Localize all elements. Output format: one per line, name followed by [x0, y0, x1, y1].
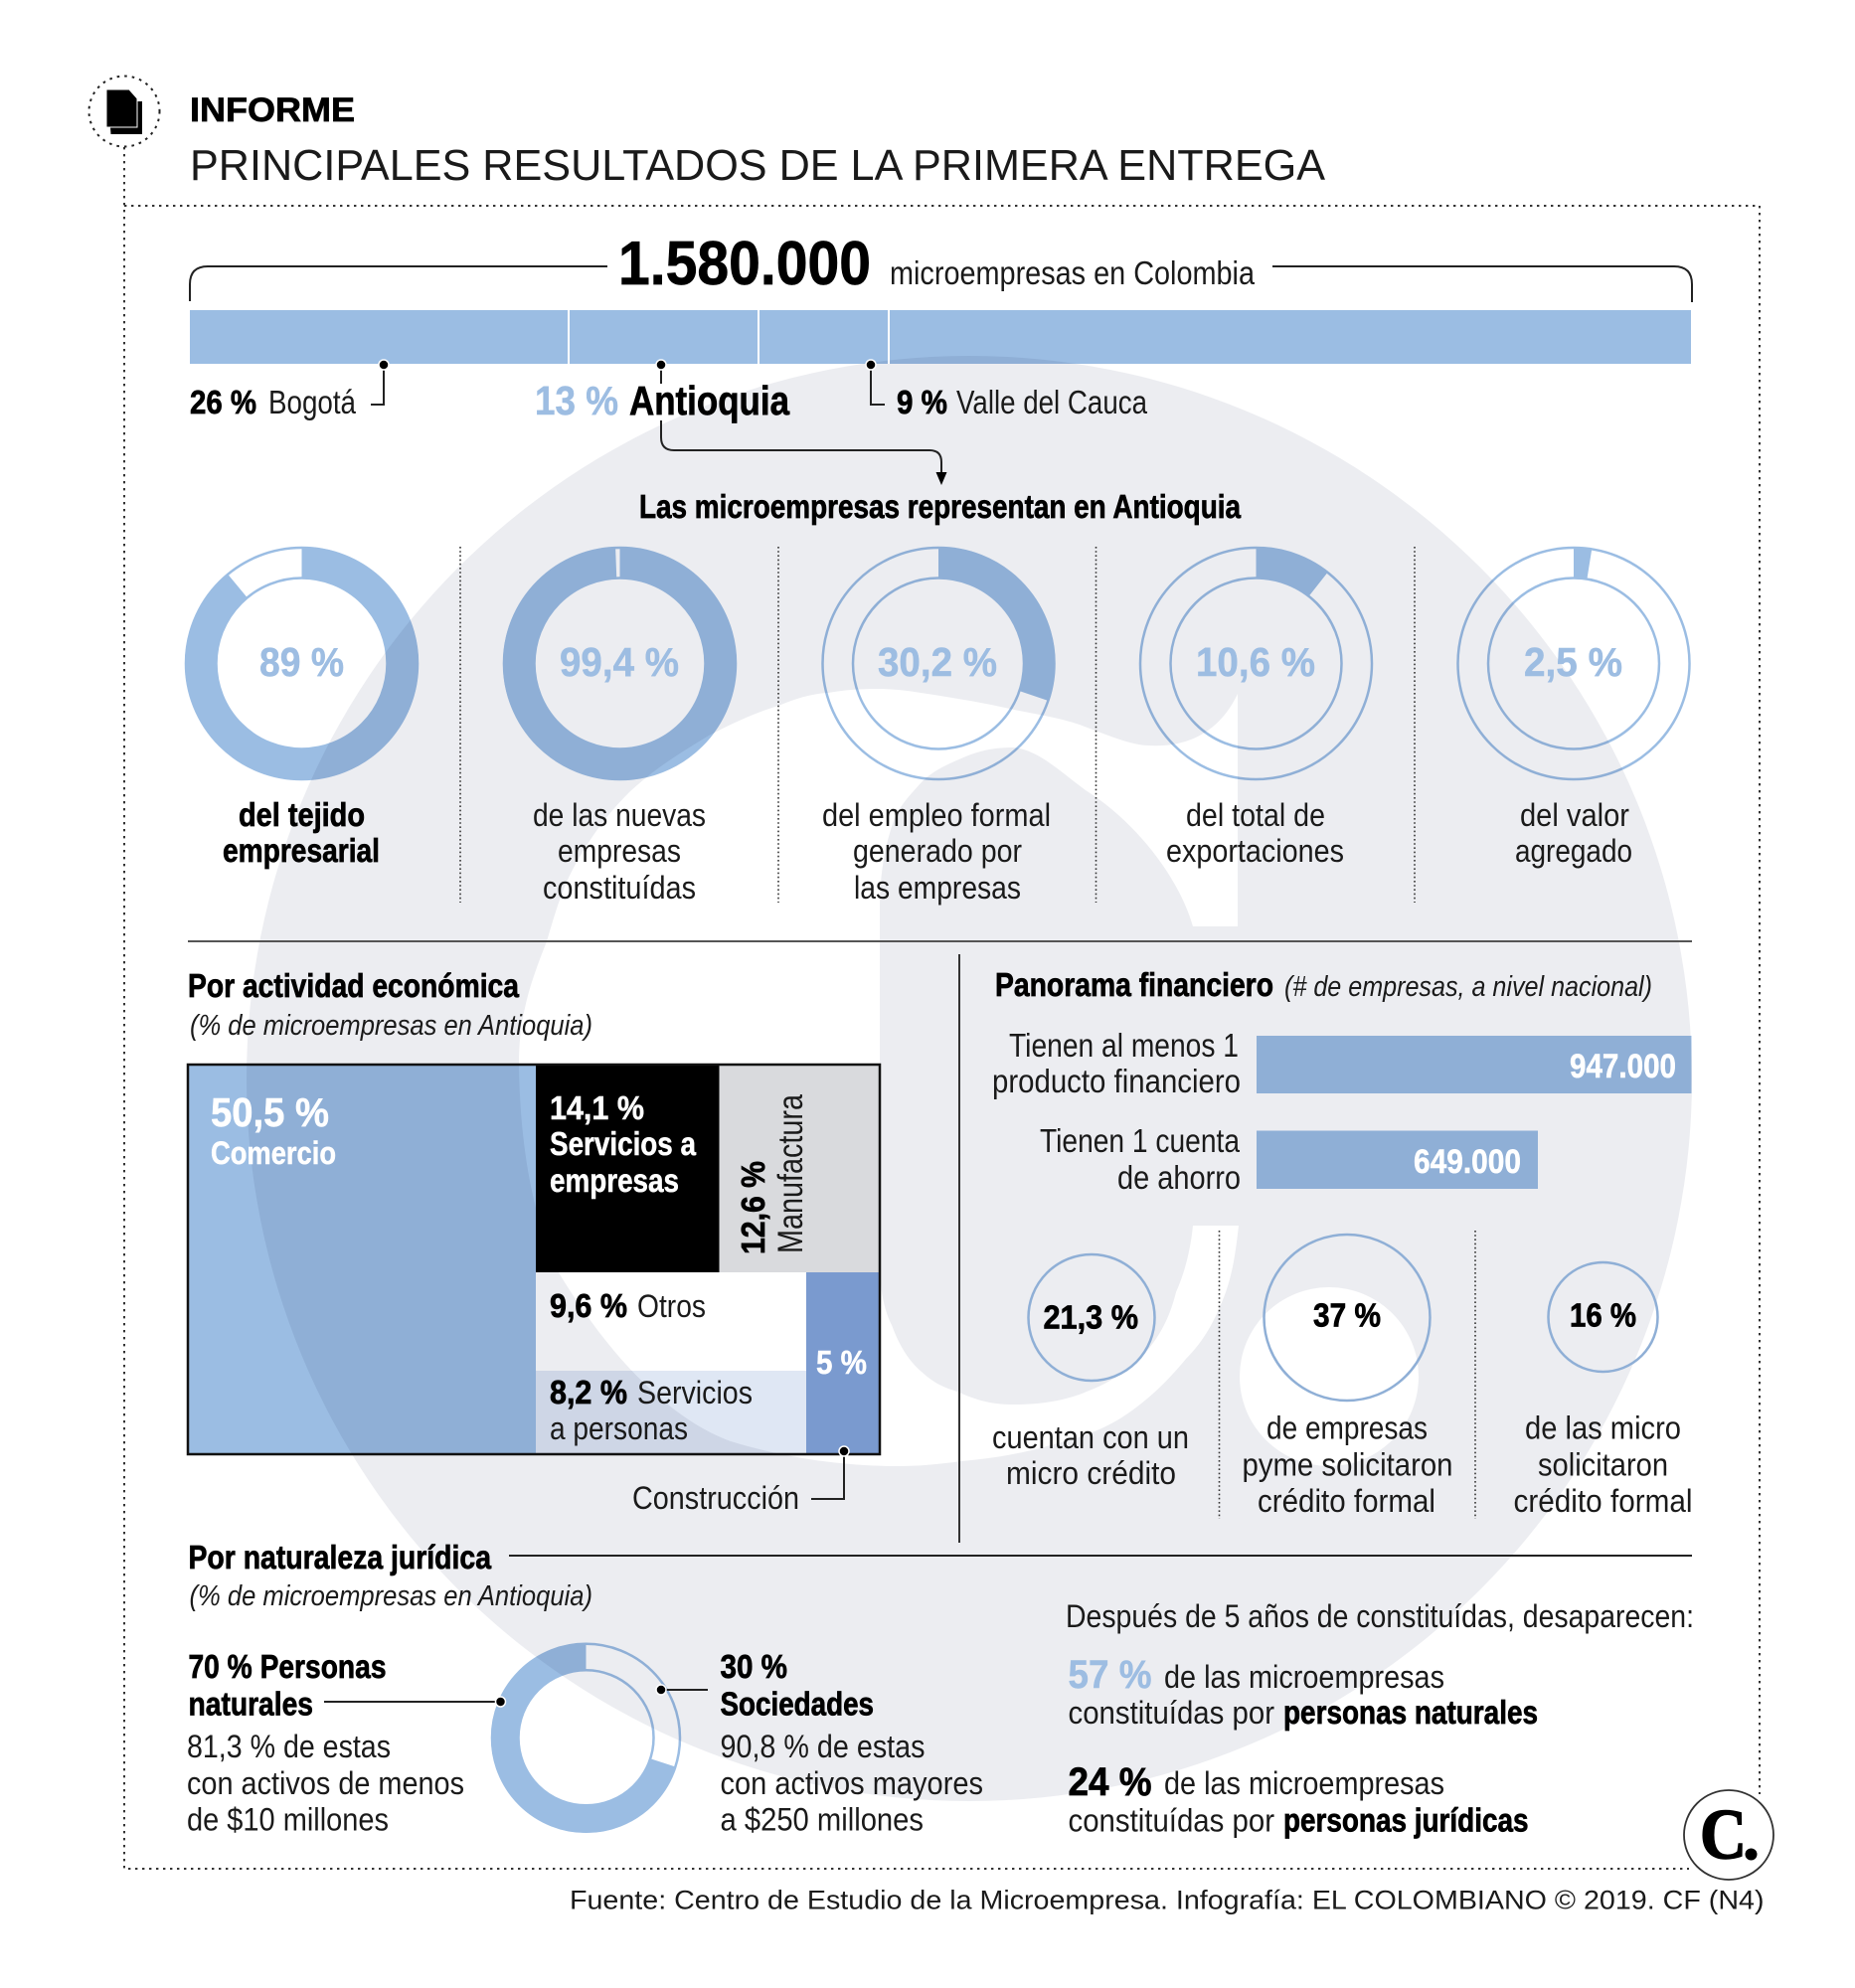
cell: servicios a empresas — [536, 1065, 720, 1272]
bubble: 37 percent: de empresas — [1266, 1409, 1428, 1445]
stat: 24 percent — [1068, 1760, 1529, 1839]
cell: servicios a empresas: empresas — [550, 1162, 679, 1199]
total microenterprises heading — [618, 230, 1256, 298]
callout: construccion — [632, 1446, 849, 1516]
cell: construccion: 5 % — [816, 1344, 867, 1381]
callout: Antioquia — [535, 360, 790, 423]
bubble: 16 percent — [1513, 1262, 1692, 1519]
stat: 24 percent: constituídas por — [1068, 1803, 1274, 1839]
ring: 10,6 percent: 10,6 % — [1196, 639, 1315, 685]
callout: personas naturales: 81,3 % de estas — [187, 1729, 391, 1764]
cell: manufactura: Manufactura — [771, 1094, 810, 1253]
callout: Bogota — [190, 360, 389, 420]
source line: Fuente: Centro de Estudio de la Microempresa. Infografía: EL COLOMBIANO © 2019. CF (N4) — [570, 1885, 1764, 1914]
heading: microenterprises in Antioquia: Las microempresas representan en Antioquia — [639, 488, 1242, 525]
cell: servicios a personas: 8,2 % — [550, 1374, 627, 1410]
icon: document — [89, 76, 159, 147]
cell: comercio: Comercio — [211, 1135, 336, 1171]
bubble: 16 percent: crédito formal — [1513, 1483, 1692, 1519]
cell: servicios a empresas: Servicios a — [550, 1125, 697, 1162]
bar: savings account — [1040, 1122, 1538, 1196]
ring: 30,2 percent: 30,2 % — [878, 639, 997, 685]
heading: by economic activity: (% de microempresas en Antioquia) — [190, 1010, 592, 1042]
ring: 89 percent — [185, 547, 419, 869]
callout: personas naturales — [187, 1648, 505, 1837]
ring: 89 percent: 89 % — [259, 639, 344, 685]
bubble: 21,3 percent: 21,3 % — [1044, 1298, 1138, 1336]
callout: Bogota: 26 % — [190, 384, 256, 420]
ring: 99,4 percent: 99,4 % — [560, 639, 679, 685]
stat: 57 percent: 57 % — [1068, 1653, 1151, 1697]
donut: legal nature — [491, 1643, 680, 1833]
callout: Antioquia: 13 % — [535, 378, 618, 423]
bar: at least one financial product: 947.000 — [1570, 1048, 1676, 1085]
logo: El Colombiano: C — [1700, 1795, 1747, 1875]
cell: manufactura: 12,6 % — [735, 1161, 771, 1254]
callout: personas naturales: 70 % Personas — [189, 1648, 386, 1685]
cell: servicios a personas: Servicios — [637, 1375, 753, 1410]
bar: at least one financial product: Tienen al menos 1 — [1009, 1027, 1239, 1064]
cell: comercio — [188, 1065, 536, 1454]
bubble: 37 percent: pyme solicitaron — [1243, 1447, 1453, 1483]
stat: 24 percent: de las microempresas — [1164, 1765, 1444, 1801]
cell: servicios a personas — [536, 1371, 806, 1454]
ring: 2,5 percent — [1457, 547, 1690, 869]
callout: Valle del Cauca: Valle del Cauca — [956, 384, 1148, 420]
ring: 30,2 percent: las empresas — [854, 870, 1021, 906]
cell: otros: Otros — [637, 1288, 706, 1324]
callout: sociedades: 90,8 % de estas — [720, 1729, 925, 1764]
heading: legal nature: (% de microempresas en Antioquia) — [189, 1580, 592, 1612]
heading: by economic activity: Por actividad económica — [188, 967, 520, 1004]
callout: sociedades: 30 % — [720, 1648, 787, 1685]
bracket right — [1272, 266, 1692, 302]
stat: 57 percent: de las microempresas — [1164, 1659, 1444, 1695]
ring: 30,2 percent — [822, 547, 1056, 906]
stat: 57 percent — [1068, 1653, 1538, 1731]
bubble: 37 percent: crédito formal — [1258, 1483, 1435, 1519]
logo: El Colombiano — [1684, 1790, 1773, 1880]
callout: sociedades — [656, 1648, 983, 1837]
total microenterprises heading: 1.580.000 — [618, 230, 871, 298]
callout: personas naturales: naturales — [189, 1686, 313, 1722]
ring: 30,2 percent: generado por — [853, 833, 1022, 869]
total microenterprises heading: microempresas en Colombia — [890, 254, 1256, 291]
callout: Antioquia: Antioquia — [629, 378, 790, 423]
bar: savings account: Tienen 1 cuenta — [1040, 1122, 1241, 1159]
heading: legal nature — [189, 1539, 1692, 1612]
cell: construccion — [806, 1272, 880, 1454]
title: PRINCIPALES RESULTADOS DE LA PRIMERA ENTREGA — [190, 141, 1326, 190]
cell: manufactura — [720, 1065, 880, 1272]
callout: personas naturales: de $10 millones — [187, 1801, 389, 1837]
stat: 24 percent: 24 % — [1068, 1760, 1151, 1804]
ring: 2,5 percent: del valor — [1520, 797, 1629, 833]
ring: 99,4 percent: constituídas — [543, 870, 696, 906]
bubble: 21,3 percent: micro crédito — [1006, 1455, 1176, 1491]
ring: 2,5 percent: 2,5 % — [1524, 639, 1622, 685]
dotted frame — [124, 147, 1760, 1869]
bubble: 21,3 percent — [992, 1254, 1189, 1491]
callout: Valle del Cauca: 9 % — [897, 384, 947, 420]
ring: 2,5 percent: agregado — [1515, 833, 1632, 869]
bubble: 37 percent: 37 % — [1313, 1296, 1381, 1334]
cell: servicios a personas: a personas — [550, 1410, 688, 1446]
stat: 57 percent: constituídas por — [1068, 1695, 1274, 1731]
ring: 10,6 percent: exportaciones — [1166, 833, 1344, 869]
title — [190, 91, 1326, 190]
heading: legal nature: Por naturaleza jurídica — [189, 1539, 492, 1575]
cell: servicios a empresas: 14,1 % — [550, 1089, 644, 1126]
treemap: economic activity — [188, 1065, 880, 1454]
bar: savings account: de ahorro — [1117, 1159, 1241, 1196]
ring: 89 percent: empresarial — [223, 832, 380, 869]
callout: sociedades: con activos mayores — [720, 1765, 983, 1801]
bubble: 16 percent: solicitaron — [1538, 1447, 1668, 1483]
ring: 99,4 percent — [503, 547, 737, 906]
heading: financial overview: (# de empresas, a nivel nacional) — [1284, 971, 1652, 1003]
bar: at least one financial product — [992, 1027, 1692, 1099]
bracket left — [190, 266, 607, 301]
callout: construccion: Construcción — [632, 1480, 799, 1516]
callout: Bogota: Bogotá — [268, 384, 357, 420]
text block: after 5 years: Después de 5 años de constituídas, desaparecen: — [1066, 1598, 1694, 1634]
bubble: 16 percent: 16 % — [1570, 1296, 1636, 1334]
watermark: large C logo — [247, 356, 1692, 1801]
ring: 99,4 percent: de las nuevas — [533, 797, 706, 833]
callout: Valle del Cauca — [866, 360, 1148, 420]
stat: 24 percent: personas jurídicas — [1283, 1801, 1529, 1839]
bar: share by region — [190, 310, 1691, 364]
callout: sociedades: Sociedades — [720, 1686, 874, 1722]
heading: by economic activity — [188, 967, 592, 1042]
cell: comercio: 50,5 % — [211, 1089, 329, 1135]
ring: 10,6 percent: del total de — [1186, 797, 1325, 833]
bubble: 21,3 percent: cuentan con un — [992, 1419, 1189, 1455]
bubble: 16 percent: de las micro — [1525, 1409, 1681, 1445]
bar: at least one financial product: producto financiero — [992, 1063, 1241, 1099]
ring: 89 percent: del tejido — [239, 796, 365, 833]
heading: financial overview: Panorama financiero — [995, 966, 1273, 1003]
title: INFORME — [190, 91, 355, 129]
ring: 10,6 percent — [1140, 547, 1372, 869]
cell: otros — [550, 1287, 706, 1324]
bubble: 37 percent — [1243, 1235, 1453, 1519]
cell: otros: 9,6 % — [550, 1287, 627, 1324]
callout: sociedades: a $250 millones — [720, 1801, 924, 1837]
heading: financial overview — [995, 966, 1652, 1003]
stat: 57 percent: personas naturales — [1283, 1694, 1538, 1731]
callout: personas naturales: con activos de menos — [187, 1765, 464, 1801]
ring: 30,2 percent: del empleo formal — [822, 797, 1051, 833]
arrow: Antioquia to heading — [661, 420, 946, 485]
bar: savings account: 649.000 — [1414, 1143, 1521, 1181]
ring: 99,4 percent: empresas — [558, 833, 681, 869]
